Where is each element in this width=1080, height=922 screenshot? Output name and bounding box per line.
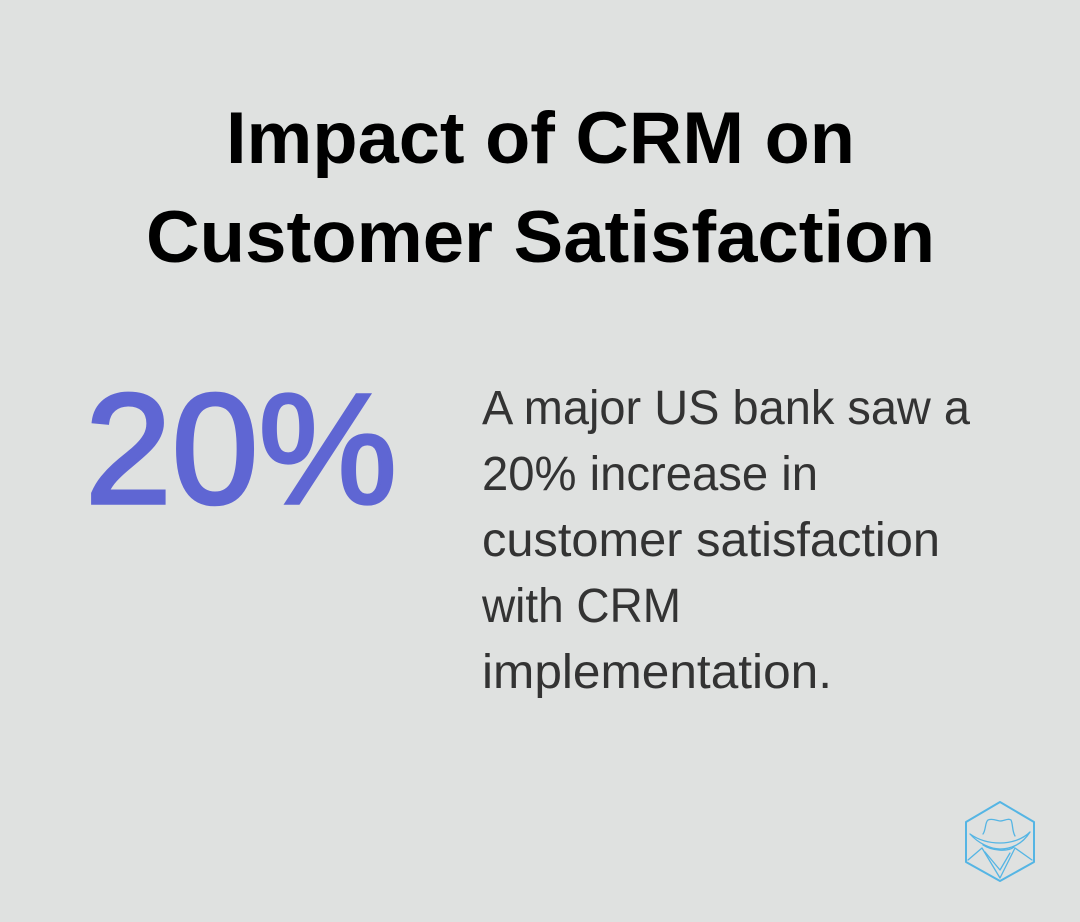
- title: [146, 98, 935, 278]
- icon: detective logo in hexagon: [966, 802, 1034, 881]
- description text: with CRM: [481, 580, 681, 633]
- description text: A major US bank saw a: [482, 382, 970, 435]
- title: Impact of CRM on: [226, 98, 855, 179]
- description text: [481, 382, 970, 699]
- title: Customer Satisfaction: [146, 197, 935, 278]
- statistic: 20%: 20%: [85, 362, 397, 537]
- description text: customer satisfaction: [482, 514, 940, 567]
- description text: implementation.: [482, 646, 832, 699]
- description text: 20% increase in: [482, 448, 818, 501]
